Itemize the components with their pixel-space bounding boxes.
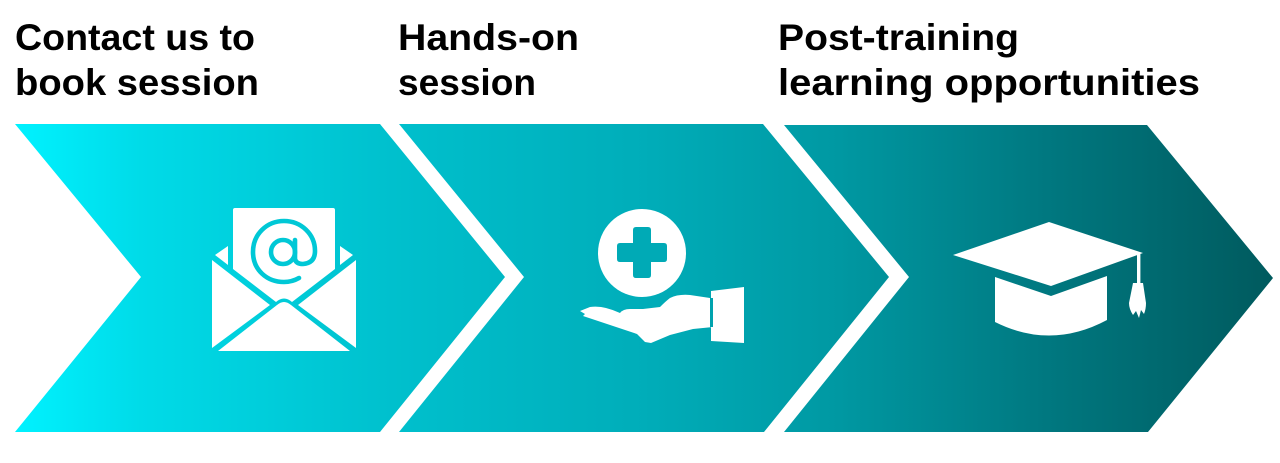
icon: graduation cap [953,222,1146,336]
heading: step 3: Post-training [778,17,1019,58]
heading: step 2: Hands-on [398,17,579,58]
icon: envelope with at sign [212,208,356,351]
heading: step 1 [15,17,259,103]
heading: step 3: learning opportunities [778,62,1200,103]
heading: step 3 [778,17,1200,103]
icon: hand holding medical cross [580,209,744,343]
chevron: step 2 [399,124,889,432]
heading: step 2: session [398,62,536,103]
heading: step 1: book session [15,62,259,103]
chevron: step 1 [15,124,505,432]
heading: step 2 [398,17,579,103]
heading: step 1: Contact us to [15,17,255,58]
chevron: step 3 [784,125,1273,432]
